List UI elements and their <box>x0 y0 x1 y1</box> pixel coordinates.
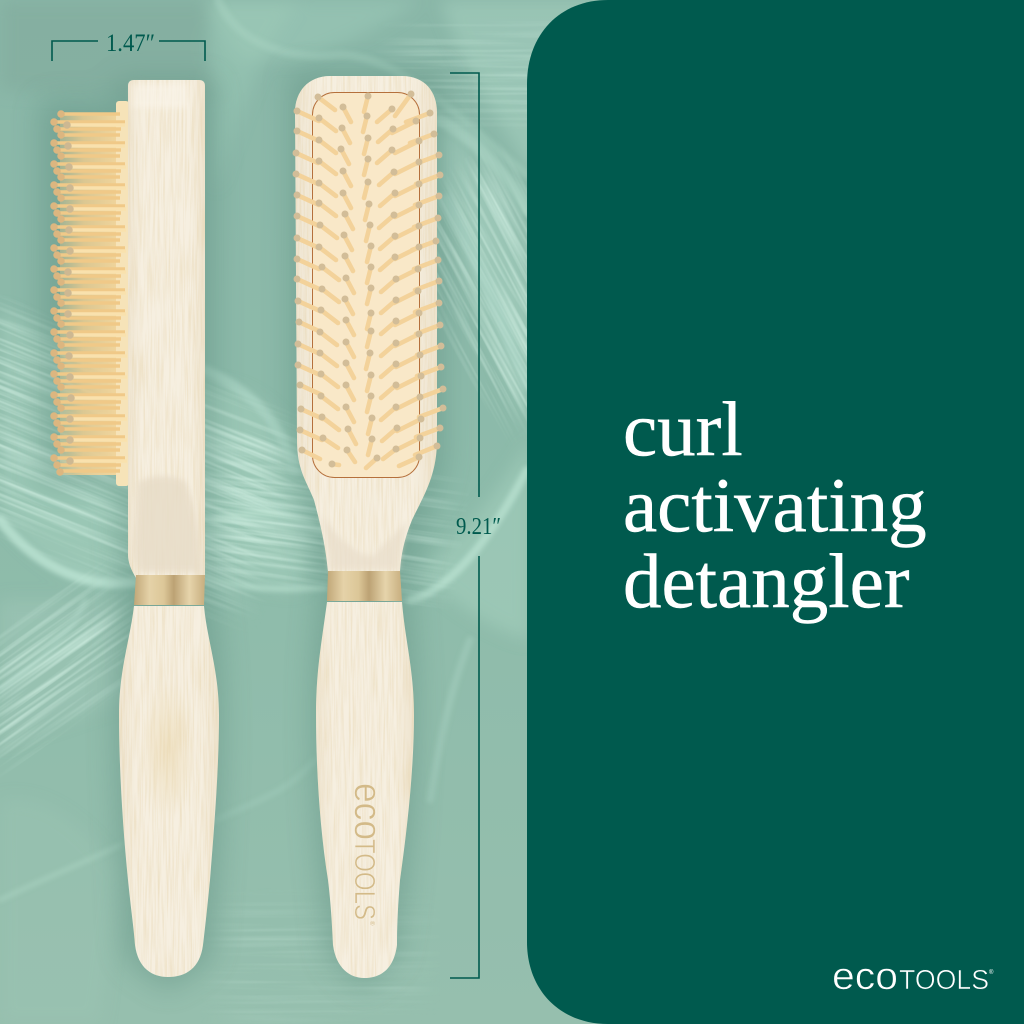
brand logo: ® <box>989 969 994 976</box>
side brush bristles <box>54 101 129 486</box>
engraved logo on handle: eco <box>346 783 388 840</box>
dimension: height 9.21 inches: 9.21″ <box>456 514 501 540</box>
brand logo: eco <box>832 956 898 998</box>
front brush handle <box>316 602 414 978</box>
leaf vein streaks <box>0 30 640 1020</box>
front brush cushion pad <box>312 92 420 478</box>
leaf background <box>0 0 640 1024</box>
front brush head and neck <box>295 76 437 572</box>
engraved logo on handle: ® <box>368 921 375 926</box>
dimension: width 1.47 inches: 1.47″ <box>106 30 155 57</box>
side view brush <box>54 80 219 977</box>
front brush pins <box>296 94 443 468</box>
dimension: width 1.47 inches <box>52 30 205 61</box>
brand logo: TOOLS <box>899 964 989 995</box>
soft shadows behind brushes <box>40 70 445 990</box>
dimension: height 9.21 inches <box>450 73 501 978</box>
front view brush <box>295 76 443 978</box>
side brush handle <box>119 606 219 977</box>
brand logo <box>832 956 994 998</box>
headline: curl <box>623 386 743 472</box>
side brush head <box>128 80 205 578</box>
side brush gold band <box>134 575 205 605</box>
headline: detangler <box>623 538 909 624</box>
front brush gold band <box>327 571 402 601</box>
engraved logo on handle <box>346 783 388 926</box>
engraved logo on handle: TOOLS <box>348 839 380 920</box>
panel: green text panel <box>527 0 1024 1024</box>
headline: activating <box>623 462 927 548</box>
